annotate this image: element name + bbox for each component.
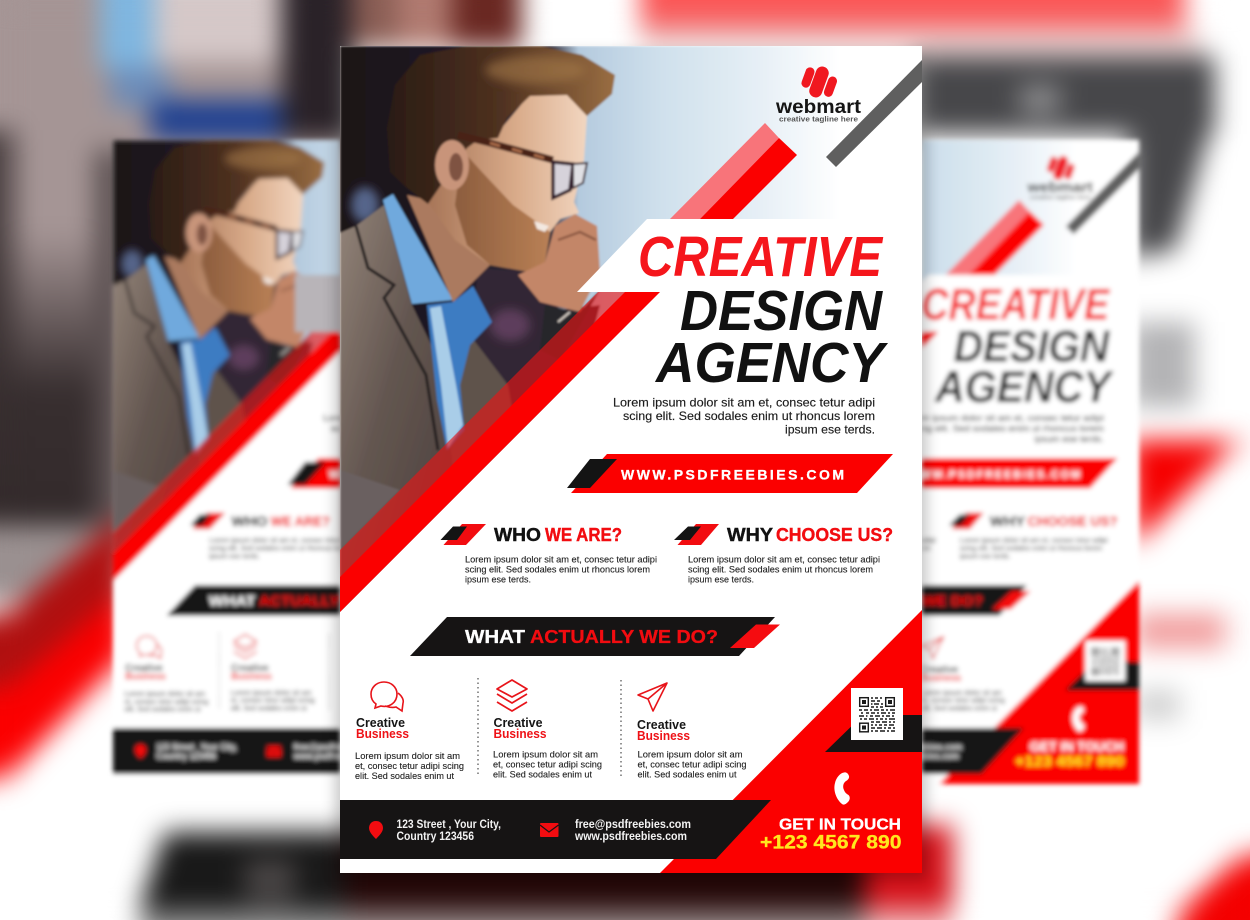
section: who we are: scing elit. Sed sodales enim ut rhoncus lorem — [465, 564, 650, 576]
contact bar: 123 Street , Your City, — [396, 819, 501, 831]
service 2 text: Business — [494, 727, 547, 741]
service 2 text: Creative — [494, 716, 543, 730]
intro text — [613, 396, 875, 436]
section: why choose us: CHOOSE US? — [776, 525, 893, 545]
section: who we are — [440, 524, 657, 586]
service 2 text: et, consec tetur adipi scing — [493, 760, 602, 770]
service 3 text: Creative — [637, 718, 686, 732]
contact bar: www.psdfreebies.com — [574, 831, 687, 843]
section: why choose us: Lorem ipsum dolor sit am et, consec tetur adipi — [688, 554, 880, 566]
banner: what actually we do: ACTUALLY WE DO? — [530, 627, 718, 647]
top red stripe — [670, 123, 797, 219]
title: DESIGN — [680, 279, 884, 343]
white content panel — [340, 219, 922, 873]
banner: what actually we do: WHAT — [465, 627, 525, 647]
photo: man with glasses on the phone — [340, 46, 922, 626]
title — [638, 225, 889, 395]
icon: chat bubbles — [371, 682, 403, 711]
service 3 text: elit. Sed sodales enim ut — [638, 770, 737, 780]
icon: who parallelograms — [440, 524, 486, 545]
main flyer — [340, 46, 922, 873]
icon: map pin — [369, 821, 383, 839]
title: AGENCY — [654, 331, 889, 395]
contact bar — [340, 800, 771, 859]
section: who we are: ipsum ese terds. — [465, 574, 531, 586]
black QR band — [825, 715, 922, 752]
get in touch: +123 4567 890 — [760, 832, 902, 854]
divider 2 — [620, 680, 622, 778]
section: why choose us: WHY — [727, 525, 773, 545]
intro text: scing elit. Sed sodales enim ut rhoncus lorem — [623, 409, 875, 423]
service 1 text — [355, 716, 464, 782]
service 3 text: Business — [637, 729, 690, 743]
icon: envelope — [540, 823, 558, 837]
service 3 text: et, consec tetur adipi scing — [638, 760, 746, 770]
service 1 text: Creative — [356, 716, 405, 730]
icon: paper plane — [638, 683, 667, 711]
logo: webmart: webmart — [775, 97, 862, 118]
service 1 text: Lorem ipsum dolor sit am — [355, 751, 460, 762]
QR code — [851, 688, 903, 740]
service 2 text: Lorem ipsum dolor sit am — [493, 750, 598, 760]
red corner panel — [660, 610, 922, 873]
divider 1 — [477, 678, 479, 776]
service 1 text: Business — [356, 727, 409, 741]
icon: layers — [497, 680, 527, 711]
website banner: WWW.PSDFREEBIES.COM — [621, 466, 844, 482]
back flyer: right, blurred — [922, 136, 1143, 788]
service 3 text: Lorem ipsum dolor sit am — [638, 750, 743, 760]
intro text: Lorem ipsum dolor sit am et, consec tetur adipi — [613, 396, 875, 410]
get in touch — [760, 816, 902, 854]
red diagonal band — [340, 292, 660, 612]
flyer shadow — [335, 52, 927, 878]
website banner — [567, 454, 893, 493]
service 2 text: elit. Sed sodales enim ut — [493, 770, 592, 780]
section: who we are: WE ARE? — [545, 525, 622, 545]
logo: webmart: creative tagline here — [779, 116, 858, 124]
back flyer: left, blurred — [109, 136, 340, 778]
grey diagonal bar — [826, 60, 922, 167]
section: who we are: Lorem ipsum dolor sit am et, consec tetur adipi — [465, 554, 657, 566]
contact bar: Country 123456 — [396, 831, 474, 843]
service 1 text: et, consec tetur adipi scing — [355, 761, 464, 772]
service 1 text: elit. Sed sodales enim ut — [355, 771, 454, 782]
icon: why parallelograms — [674, 524, 719, 545]
logo: webmart — [775, 65, 862, 124]
section: who we are: WHO — [494, 525, 541, 545]
banner: what actually we do — [410, 617, 780, 656]
contact bar: free@psdfreebies.com — [575, 819, 691, 831]
service 2 text — [493, 716, 602, 780]
get in touch: GET IN TOUCH — [779, 816, 901, 834]
red translucent diagonal band — [340, 292, 630, 582]
service 3 text — [637, 718, 746, 780]
section: why choose us: ipsum ese terds. — [688, 574, 754, 586]
section: why choose us: scing elit. Sed sodales enim ut rhoncus lorem — [688, 564, 873, 576]
intro text: ipsum ese terds. — [785, 422, 875, 436]
icon: phone — [834, 772, 850, 805]
section: why choose us — [674, 524, 893, 586]
title: CREATIVE — [638, 225, 884, 289]
